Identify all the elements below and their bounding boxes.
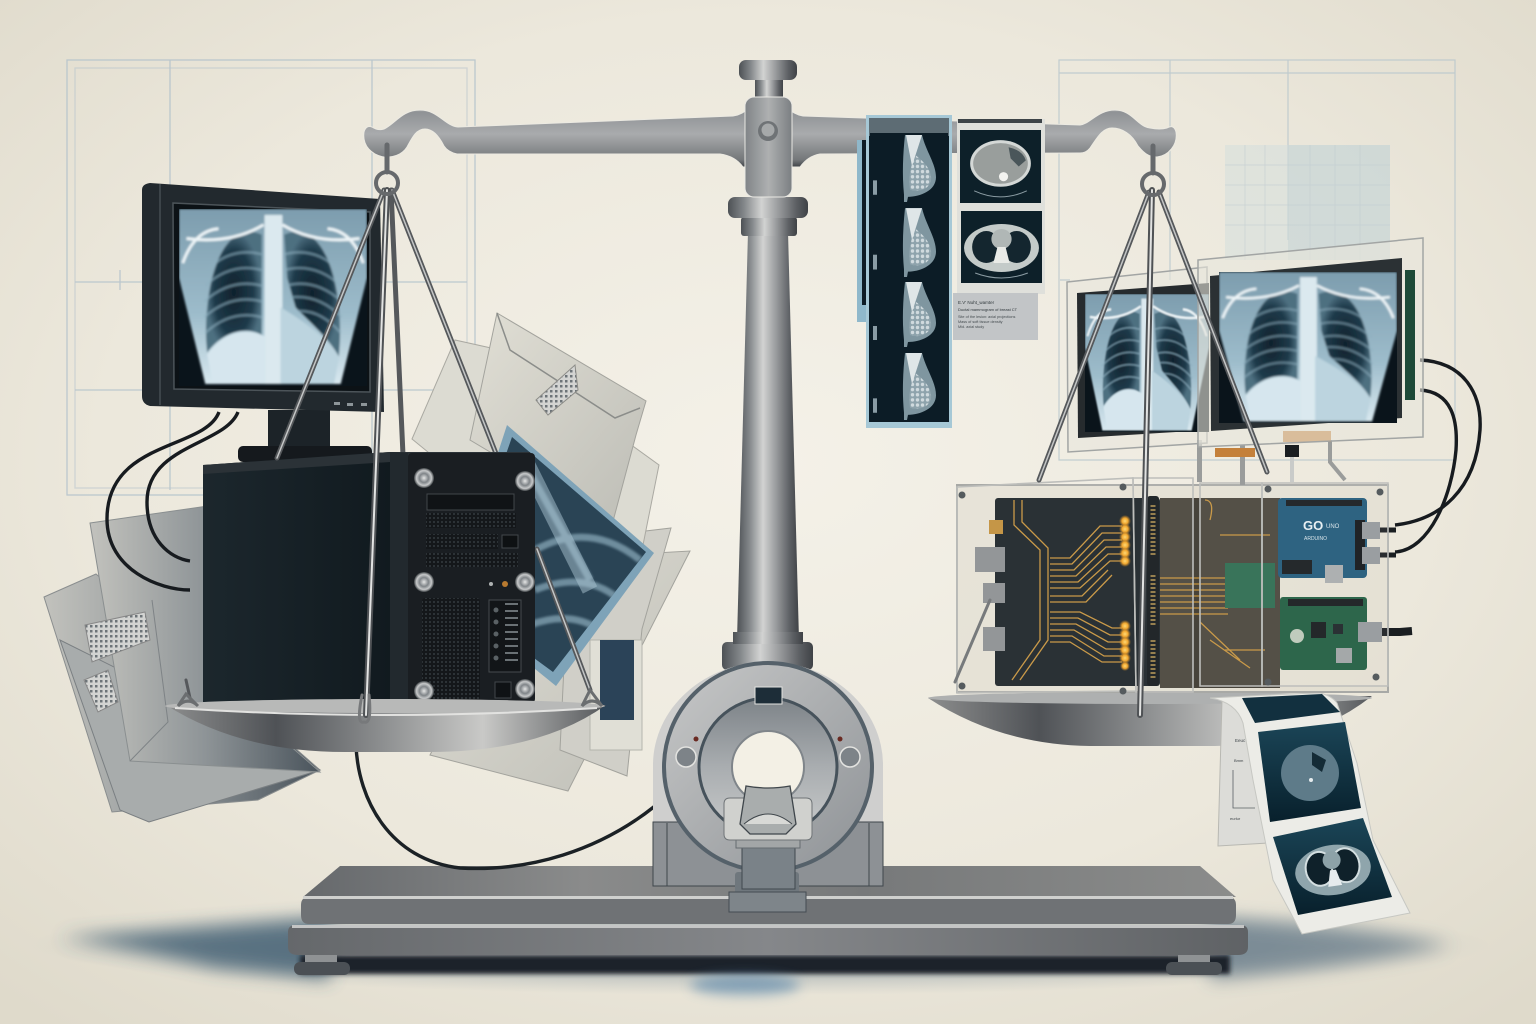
scale beam bbox=[364, 97, 1176, 197]
right scale pan bbox=[928, 692, 1372, 746]
port panel bbox=[489, 600, 521, 672]
ventilation grille bbox=[422, 598, 480, 702]
central column bbox=[722, 60, 813, 670]
film roll upper CT frame bbox=[1258, 722, 1361, 822]
monitor cables bbox=[107, 412, 238, 590]
Arduino board bbox=[1278, 498, 1367, 583]
board ports and plugs bbox=[1358, 522, 1412, 642]
left monitor bbox=[107, 183, 384, 590]
film roll on right pan bbox=[1210, 693, 1410, 934]
left foot bbox=[294, 955, 350, 975]
cable from pan to CT scanner bbox=[356, 745, 655, 868]
left envelope postage stamps bbox=[84, 612, 150, 712]
Arduino board: UNO bbox=[1326, 524, 1340, 530]
report sheet behind film: Eeuc bbox=[1235, 738, 1246, 743]
drive bays bbox=[426, 494, 518, 567]
indicator lights bbox=[694, 736, 842, 742]
patient table bbox=[724, 786, 812, 912]
monitor stand bbox=[238, 410, 372, 462]
right speaker bbox=[840, 747, 860, 767]
tower screws bbox=[414, 468, 535, 701]
transparent electronics enclosure bbox=[957, 478, 1412, 694]
right hanger rods bbox=[955, 146, 1267, 715]
report sheet behind film: eurlur bbox=[1230, 816, 1241, 821]
front display x-ray image bbox=[1219, 272, 1397, 423]
acrylic panels bbox=[957, 478, 1388, 693]
computer tower bbox=[203, 452, 535, 704]
right front display bbox=[1198, 238, 1423, 447]
acrylic display mounts bbox=[1197, 431, 1345, 485]
dark circuit board bbox=[995, 498, 1160, 686]
CT scanner bbox=[653, 662, 883, 912]
right back cables bbox=[1395, 360, 1480, 552]
second translucent board bbox=[1160, 498, 1280, 688]
enclosure screws bbox=[958, 484, 1384, 694]
right rear display bbox=[1067, 267, 1209, 452]
film roll lower CT frame bbox=[1273, 818, 1392, 915]
left envelope stack bbox=[44, 505, 320, 822]
left blueprint grid bbox=[67, 60, 475, 495]
film caption label: Site of the lesion: axial projections bbox=[958, 315, 1016, 319]
hanging film strips bbox=[857, 115, 1045, 428]
Arduino board: ARDUINO bbox=[1304, 536, 1327, 542]
film caption label bbox=[953, 293, 1038, 340]
report sheet behind film bbox=[1218, 700, 1268, 846]
display driver strip bbox=[1405, 270, 1415, 400]
Raspberry Pi board bbox=[1280, 597, 1367, 670]
film caption label: Ductal mammogram of breast CT bbox=[958, 307, 1018, 312]
film caption label: Mass of soft tissue density bbox=[958, 320, 1003, 324]
left speaker bbox=[676, 747, 696, 767]
orange status LEDs bbox=[1119, 515, 1131, 671]
status lights bbox=[489, 581, 508, 587]
scanner bore opening bbox=[732, 731, 804, 803]
scale base plate bbox=[288, 866, 1248, 975]
connector pin strip bbox=[1147, 496, 1159, 686]
usb connectors bbox=[975, 520, 1005, 651]
floor shadow bbox=[30, 895, 1490, 995]
power button bbox=[495, 682, 511, 698]
right blueprint grid bbox=[1059, 60, 1455, 460]
film caption label: Mid. axial study bbox=[958, 325, 984, 329]
CT film sheet bbox=[957, 119, 1045, 294]
scanner display bbox=[755, 687, 782, 704]
Arduino board: GO bbox=[1303, 518, 1323, 533]
back left hanger rods bbox=[391, 190, 590, 690]
gold circuit traces bbox=[1012, 500, 1270, 680]
film caption label: E.V' Nuht_wamter bbox=[958, 300, 995, 305]
rear display x-ray image bbox=[1085, 294, 1209, 432]
right envelope stack bbox=[412, 313, 690, 791]
report sheet behind film: Bmm bbox=[1234, 758, 1244, 763]
monitor buttons bbox=[334, 402, 367, 406]
monitor x-ray image bbox=[179, 209, 367, 386]
pivot bolt bbox=[758, 121, 778, 141]
mammogram film strip bbox=[857, 115, 952, 428]
left scale pan bbox=[165, 699, 606, 752]
left front hanger rods bbox=[178, 145, 602, 722]
small green board bbox=[1225, 563, 1275, 608]
tilted x-ray film bbox=[498, 425, 654, 686]
left envelopes behind the computer bbox=[44, 313, 690, 822]
right foot bbox=[1166, 955, 1222, 975]
